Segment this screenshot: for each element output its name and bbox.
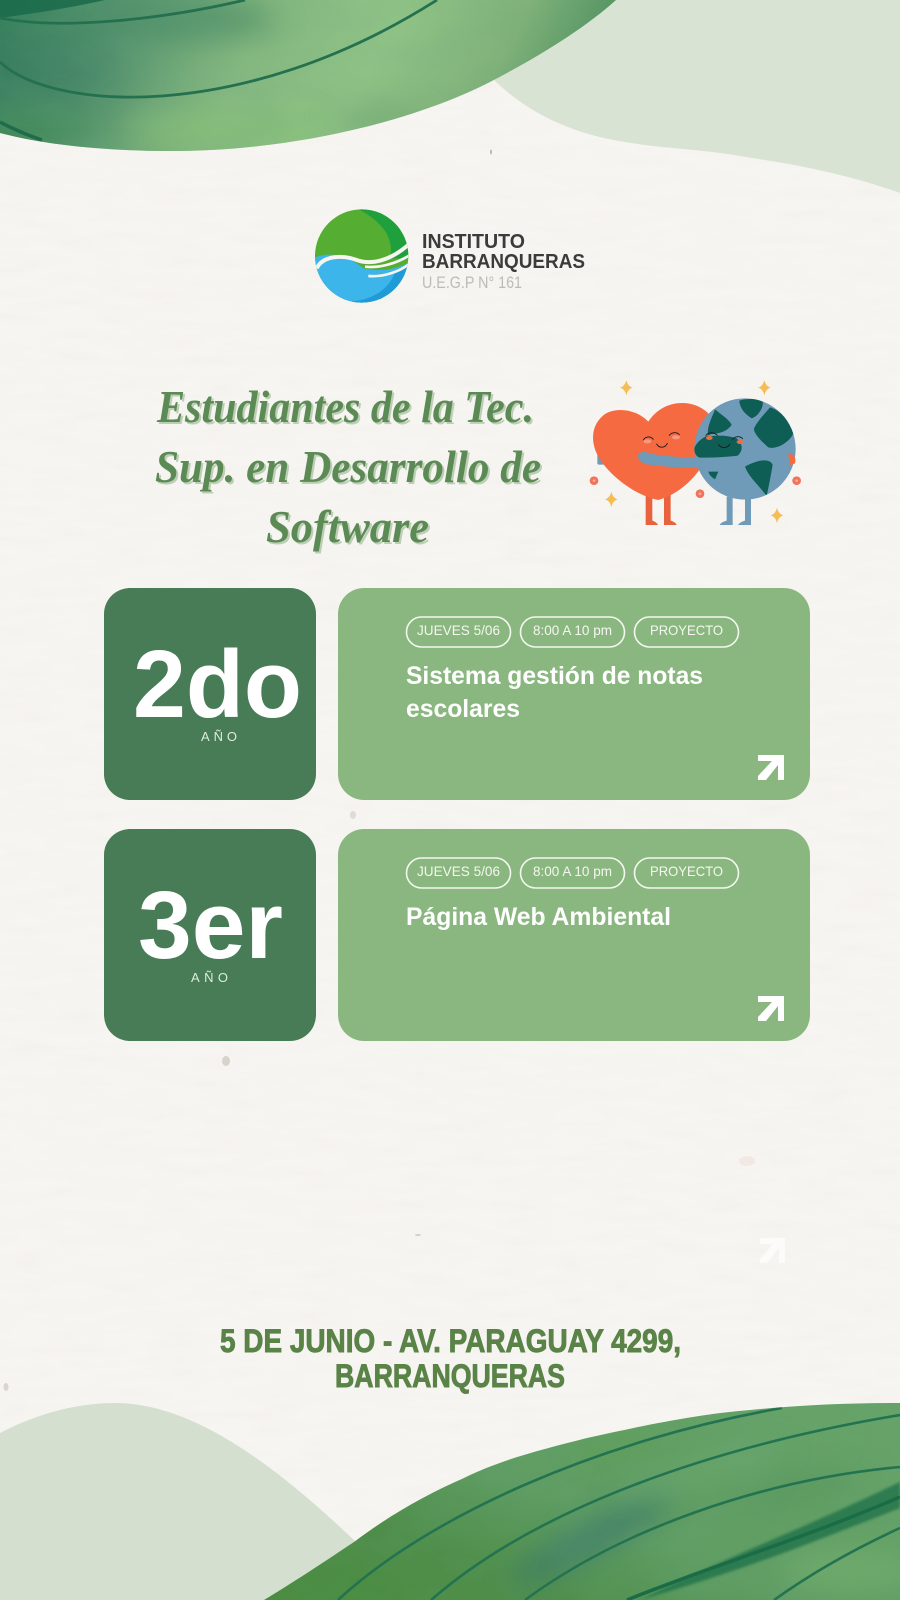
logo text: BARRANQUERAS [422, 250, 585, 273]
icon: flowers [590, 476, 801, 498]
year number: 3er [138, 872, 283, 979]
panel: 3er año [104, 829, 316, 1041]
tags: PROYECTO [650, 622, 723, 638]
title: Software [266, 501, 429, 552]
tags: PROYECTO [650, 863, 723, 879]
tags: JUEVES 5/06 [417, 622, 500, 638]
tags [406, 858, 738, 888]
icon: arrow [758, 755, 784, 780]
tags: 8:00 A 10 pm [533, 863, 612, 879]
title: Sup. en Desarrollo de [155, 441, 541, 492]
panel: 2do año [104, 588, 316, 800]
icon: heart [593, 403, 708, 500]
illustration: heart hugging the earth [590, 380, 801, 525]
decorative pale shape: top right [494, 0, 900, 193]
icon: legs [646, 493, 751, 525]
icon: arrow [758, 996, 784, 1021]
card background [338, 829, 810, 1041]
icon: faint arrow [760, 1238, 785, 1263]
location text: 5 DE JUNIO - AV. PARAGUAY 4299, [220, 1323, 681, 1359]
year tile [104, 588, 316, 800]
logo: Instituto Barranqueras [313, 208, 585, 307]
logo text [422, 230, 585, 292]
year label: AÑO [191, 970, 228, 985]
icon: hand behind [597, 453, 605, 465]
card background [338, 588, 810, 800]
project title: escolares [406, 695, 520, 723]
decorative pale shape: bottom left [0, 1403, 356, 1600]
project title: Página Web Ambiental [406, 903, 671, 931]
tags: JUEVES 5/06 [417, 863, 500, 879]
year label: AÑO [201, 729, 237, 744]
icon: faces [643, 433, 743, 448]
tags [406, 617, 738, 647]
project title [406, 662, 703, 723]
decorative watercolor leaf: top left [0, 0, 640, 160]
logo icon: green and blue circle [313, 208, 410, 307]
project title: Sistema gestión de notas [406, 662, 703, 690]
decorative watercolor leaf: bottom right [260, 1400, 900, 1600]
tags: 8:00 A 10 pm [533, 622, 612, 638]
title [155, 381, 541, 552]
icon: right-hand piece [788, 454, 795, 465]
logo text: U.E.G.P N° 161 [422, 273, 522, 292]
title: Estudiantes de la Tec. [156, 381, 534, 432]
location text: BARRANQUERAS [335, 1358, 565, 1394]
year number: 2do [133, 631, 302, 738]
logo text: INSTITUTO [422, 230, 525, 253]
icon: globe [694, 398, 796, 500]
icon: arm [638, 452, 746, 468]
year tile [104, 829, 316, 1041]
icon: sparkles [605, 380, 783, 523]
location text [220, 1323, 681, 1394]
panel: proyecto 2do año [338, 588, 810, 800]
panel: proyecto 3er año [338, 829, 810, 1041]
